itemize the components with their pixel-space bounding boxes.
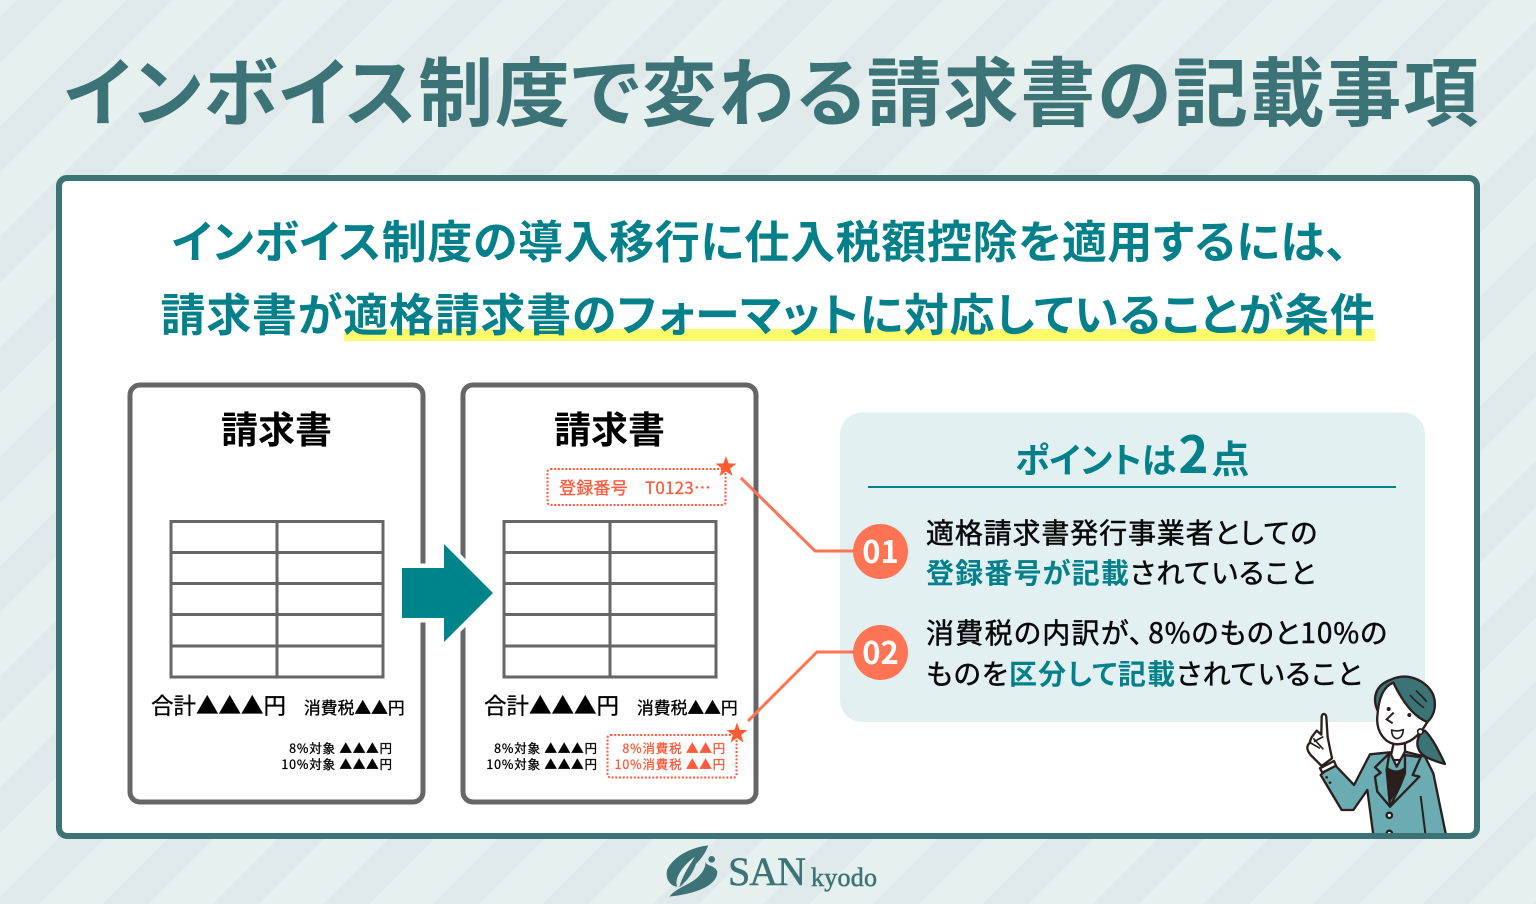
tax breakdown box: 10%消費税 ▲▲円 (615, 754, 726, 773)
badge 01 (853, 524, 908, 579)
registration number box (548, 469, 726, 505)
connector two (748, 652, 856, 721)
badge 02: 02 (862, 628, 899, 673)
invoice totals after: 8%対象 ▲▲▲円 (494, 738, 598, 757)
logo (667, 845, 877, 897)
invoice totals before: 合計▲▲▲円 (151, 689, 286, 721)
subtitle: 請求書が適格請求書のフォーマットに対応していることが条件 (160, 279, 1376, 344)
sleeve buttons (1325, 776, 1331, 784)
tax breakdown box (608, 735, 736, 778)
logo mark (667, 845, 717, 897)
point panel (840, 412, 1425, 722)
star marker one (716, 456, 736, 476)
subtitle (160, 206, 1376, 344)
invoice table before (171, 521, 383, 677)
point two text: ものを区分して記載されていること (926, 653, 1363, 693)
registration number box: 登録番号 T0123… (559, 474, 711, 499)
badge 01: 01 (862, 527, 899, 572)
main panel background (59, 178, 1477, 836)
face details (1387, 691, 1427, 739)
invoice after: 請求書 (554, 400, 665, 454)
ponytail (1417, 731, 1445, 764)
subtitle highlight (344, 329, 1375, 341)
connector one (741, 478, 856, 551)
invoice table after (504, 521, 716, 677)
jacket side seam (1421, 796, 1425, 833)
hair (1375, 677, 1435, 722)
title: インボイス制度で変わる請求書の記載事項 (64, 33, 1480, 142)
logo wordmark: SAN (728, 849, 806, 894)
hand and sleeve details (1310, 737, 1323, 749)
logo wordmark: kyodo (811, 863, 877, 892)
point two text (926, 612, 1388, 693)
neck (1390, 742, 1405, 760)
invoice totals before: 8%対象 ▲▲▲円 (289, 738, 393, 757)
invoice before (130, 385, 423, 802)
invoice totals before (151, 689, 405, 773)
invoice totals after: 10%対象 ▲▲▲円 (486, 754, 598, 773)
left lapel (1375, 753, 1390, 807)
badge 02 (853, 625, 908, 680)
face (1377, 683, 1427, 744)
invoice before: 請求書 (221, 400, 332, 454)
point heading: ポイントは2点 (1015, 414, 1249, 488)
invoice after (463, 385, 756, 802)
pointing hand (1307, 714, 1332, 766)
cuff (1320, 761, 1336, 773)
woman pointing illustration (1307, 677, 1446, 836)
point one text (926, 512, 1318, 592)
invoice totals before: 消費税▲▲円 (304, 695, 405, 719)
invoice totals after: 合計▲▲▲円 (484, 689, 619, 721)
invoice totals before: 10%対象 ▲▲▲円 (281, 754, 393, 773)
inner top (1386, 766, 1405, 802)
star marker two (726, 722, 748, 742)
subtitle: インボイス制度の導入移行に仕入税額控除を適用するには、 (172, 206, 1348, 271)
point one text: 適格請求書発行事業者としての (926, 512, 1318, 552)
point heading rule (868, 486, 1396, 488)
point one text: 登録番号が記載されていること (926, 552, 1316, 592)
right lapel (1390, 755, 1421, 807)
tax breakdown box: 8%消費税 ▲▲円 (622, 738, 726, 757)
jacket (1321, 752, 1446, 835)
logo wordmark (728, 849, 877, 894)
buttons (1387, 813, 1392, 836)
invoice totals after (484, 689, 738, 773)
invoice totals after: 消費税▲▲円 (637, 695, 738, 719)
main panel border (59, 178, 1477, 836)
arrow (402, 544, 493, 642)
point two text: 消費税の内訳が、8%のものと10%の (926, 612, 1388, 652)
